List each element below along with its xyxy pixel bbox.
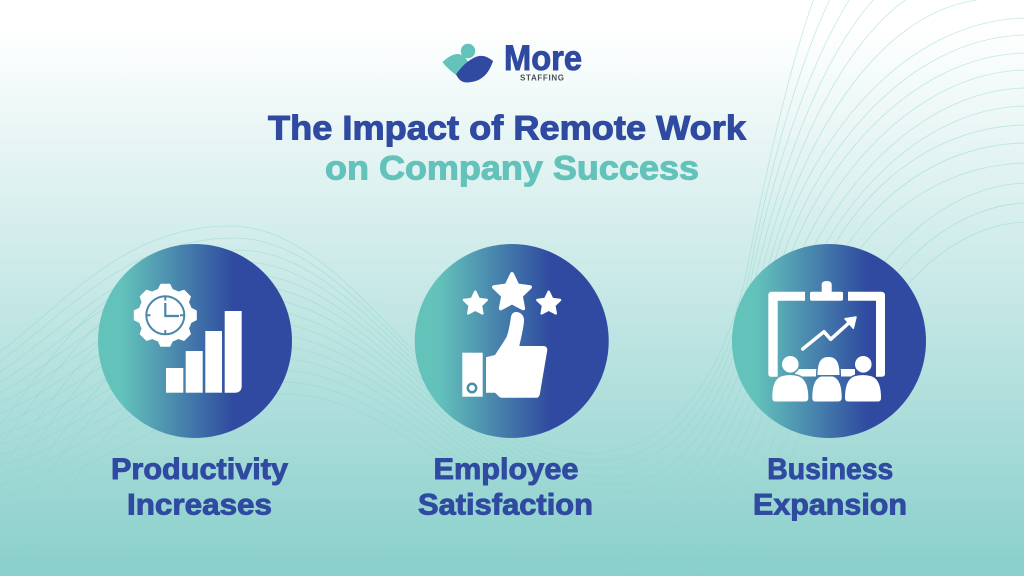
logo mark [442, 44, 493, 82]
icon: rising bar chart [166, 311, 242, 393]
label: employee satisfaction: Satisfaction [418, 488, 593, 521]
icon: three stars [464, 274, 560, 313]
circle badge [98, 244, 292, 438]
board frame [768, 281, 885, 377]
icon: gear with clock [134, 284, 196, 346]
logo wordmark: More [504, 39, 582, 78]
title line 1: The Impact of Remote Work [268, 110, 746, 148]
rising arrow [803, 317, 856, 349]
label: productivity increases [111, 453, 289, 521]
logo tagline: STAFFING [520, 74, 564, 82]
icon: presentation board with audience [768, 281, 885, 402]
label: productivity increases: Increases [127, 488, 272, 521]
audience of three people [772, 356, 881, 402]
label: productivity increases: Productivity [111, 453, 289, 486]
icon: thumbs up [462, 312, 547, 398]
label: employee satisfaction [418, 453, 593, 521]
label: business expansion: Business [767, 453, 893, 486]
panel: employee satisfaction [415, 244, 609, 521]
title [268, 110, 746, 188]
panel: business expansion [732, 244, 926, 521]
label: business expansion: Expansion [753, 488, 907, 521]
circle badge [415, 244, 609, 438]
label: employee satisfaction: Employee [434, 453, 578, 486]
title line 2: on Company Success [325, 150, 699, 188]
label: business expansion [753, 453, 907, 521]
panel: productivity increases [98, 244, 292, 521]
logo: More Staffing [442, 39, 582, 82]
circle badge [732, 244, 926, 438]
